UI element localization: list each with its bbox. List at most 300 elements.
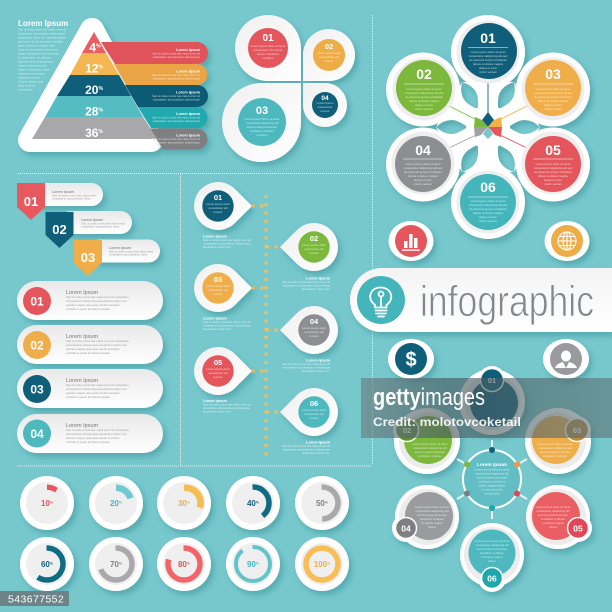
hub petal 05: sed do eiusmod tempor <box>538 513 568 517</box>
hub center ring: ut enim ad minim <box>481 488 504 492</box>
petal 03: aliqua ut enim <box>544 103 563 107</box>
hub petal 04: consectetur adipiscing elit <box>415 509 449 513</box>
pill 03: 03 <box>30 382 44 396</box>
pyramid description text: Sed ut unde omnis iste natus error sit <box>18 28 66 32</box>
pyramid description text: voluptatem accusantium doloremque <box>18 32 66 36</box>
icon: dollar: $ <box>405 349 417 371</box>
pyramid percent labels: % <box>98 129 103 135</box>
clover 04: 04 <box>321 95 329 102</box>
pyramid description text: ipsam voluptatem quia voluptas <box>18 52 59 56</box>
timeline item 01: laudantium totam rem <box>203 245 232 249</box>
petal 06: do eiusmod tempor incididunt <box>469 207 507 211</box>
petal 01: minim veniam <box>479 70 497 74</box>
timeline item 01: voluptatem accusantium doloremque <box>203 242 251 246</box>
hub petal 06: consectetur adipiscing elit <box>475 543 509 547</box>
timeline item 01 <box>202 190 251 249</box>
hub petal 04: 04 <box>401 524 411 534</box>
petal 04: Lorem ipsum dolor sit amet <box>406 162 441 166</box>
timeline item 05: consectetur elit <box>208 371 228 375</box>
pill 01: aperiam eaque ipsa quae ab illo inventore <box>66 303 120 307</box>
ribbon labels: voluptatem accusantium doloremque <box>153 76 200 80</box>
pill 03: veritatis et quasi architecto beatae <box>66 395 110 399</box>
pill 04: 04 <box>30 427 44 441</box>
petal 04: consectetur adipiscing elit sed <box>404 166 443 170</box>
petal 04: minim veniam <box>414 182 432 186</box>
clover 02 <box>313 39 345 71</box>
hub petal 02 <box>396 413 455 469</box>
timeline item 04: 04 <box>310 317 319 326</box>
hub petal 06: incididunt ut labore <box>480 551 505 555</box>
gauge 70% <box>100 548 132 580</box>
title banner <box>350 268 612 332</box>
clover 02: tempor <box>324 59 334 63</box>
petal 02 <box>392 58 456 120</box>
timeline item 05: Sed ut unde omnis iste natus error sit <box>203 402 251 406</box>
gauge 40%: % <box>256 500 260 504</box>
timeline item 03: Sed ut unde omnis iste natus error sit <box>203 320 251 324</box>
petal 03: 03 <box>545 66 561 82</box>
timeline item 03 <box>202 272 251 331</box>
pill 04: aperiam eaque ipsa quae ab illo inventore <box>66 436 120 440</box>
pill 04: veritatis et quasi architecto beatae <box>66 440 110 444</box>
icon: globe <box>544 221 590 261</box>
image id label <box>0 591 69 606</box>
gauge 100%: 100 <box>314 560 327 569</box>
pill 01: 01 <box>30 294 44 308</box>
ribbon labels: voluptatem accusantium doloremque <box>153 98 200 102</box>
ribbon labels: Sed ut unde omnis iste natus error sit <box>152 94 200 98</box>
pill 02: Lorem Ipsum <box>66 334 99 340</box>
hub petal 06: 06 <box>487 574 497 584</box>
hub petal 03 <box>530 413 588 469</box>
hub center ring: sed do eiusmod tempor <box>477 476 507 480</box>
pyramid percent labels: % <box>98 64 103 70</box>
petal 06 <box>456 170 520 234</box>
pill 04: Lorem Ipsum <box>66 423 99 429</box>
hub petal 02: incididunt ut labore <box>418 454 443 458</box>
panel: hub diagram <box>392 366 592 592</box>
hub petal 05: aliqua <box>549 525 557 529</box>
petal 01: do eiusmod tempor incididunt <box>469 58 507 62</box>
petal 06: labore et dolore magna <box>473 211 503 215</box>
ribbon labels: Lorem Ipsum <box>176 134 201 138</box>
pyramid description text: consectetur <box>18 88 33 92</box>
hub petal 06 <box>464 527 520 588</box>
petal 02: do eiusmod tempor incididunt <box>405 95 443 99</box>
petal 01 <box>456 20 520 84</box>
gauge 10% <box>41 484 58 508</box>
pill 02: 02 <box>30 338 44 352</box>
clover 04 <box>312 92 338 118</box>
ribbon labels: Lorem Ipsum <box>176 70 201 74</box>
tag row 03: Sed ut unde omnis iste natus error <box>109 250 153 254</box>
watermark band <box>361 378 612 438</box>
hub petal 03: 03 <box>573 426 581 435</box>
hub white petals <box>392 366 592 592</box>
gauge 70%: 70 <box>110 560 119 569</box>
timeline item 02: 02 <box>310 234 318 243</box>
ribbon labels: Sed ut unde omnis iste natus error sit <box>152 116 200 120</box>
hub petal 02: Lorem ipsum dolor sit amet <box>413 442 448 446</box>
timeline item 03: consectetur elit <box>208 288 228 292</box>
hub center ring: Lorem Ipsum <box>477 462 507 468</box>
hub petal 01: 01 <box>488 376 496 385</box>
timeline item 06: tempor <box>310 416 319 420</box>
petal 06: 06 <box>480 179 496 195</box>
hub petal 04: aliqua <box>428 525 436 529</box>
gauge 70%: % <box>119 562 123 566</box>
pill 03 <box>17 369 163 408</box>
panel: six petal flower diagram <box>373 15 603 239</box>
timeline item 05: tempor <box>214 375 223 379</box>
hub center ring: incididunt ut labore et <box>478 480 506 484</box>
hub petal 05: Lorem ipsum dolor sit amet <box>536 505 571 509</box>
tag row 03: voluptatem accusantium dolor <box>109 252 147 256</box>
timeline item 03: Lorem Ipsum <box>203 316 227 320</box>
hub petal 01 <box>464 368 520 430</box>
gauge 50% <box>306 487 338 519</box>
watermark band: gettyimages <box>373 384 485 411</box>
timeline item 05: Lorem ipsum dolor <box>206 367 230 371</box>
gauge 10%: % <box>50 500 54 504</box>
gauge 90%: 90 <box>247 560 256 569</box>
hub petal 05 <box>530 489 588 545</box>
timeline item 01: Lorem ipsum dolor <box>206 202 230 206</box>
petal 03: minim veniam <box>544 107 562 111</box>
tag row 03: Lorem Ipsum <box>109 246 131 250</box>
gauge 60%: 60 <box>41 560 50 569</box>
timeline item 04: Lorem ipsum dolor <box>302 326 326 330</box>
pyramid description text: ipsa quae ab illo inventore veritatis <box>18 40 63 44</box>
pyramid percent labels: 36 <box>85 126 98 140</box>
petal 01: labore et dolore magna <box>473 62 503 66</box>
pill 01: accusantium doloremque laudantium totam rem <box>66 299 128 303</box>
timeline item 01: consectetur elit <box>208 206 228 210</box>
timeline item 06 <box>282 396 331 455</box>
gauge 60%: % <box>50 562 54 566</box>
center hexagon connector <box>449 78 527 148</box>
petal 03: do eiusmod tempor incididunt <box>534 95 572 99</box>
petal 05: aliqua ut enim <box>544 178 563 182</box>
pyramid description text: quisquam est qui <box>18 76 40 80</box>
petal 02: minim veniam <box>415 107 433 111</box>
panel: arrow tag list <box>17 183 160 276</box>
tag row 01 <box>17 183 103 220</box>
pill 02 <box>17 325 163 364</box>
pyramid description text: dicta sunt explicabo nemo enim <box>18 48 59 52</box>
petal 04: aliqua ut enim <box>414 178 433 182</box>
clover 03: consectetur adipiscing elit <box>245 121 279 125</box>
timeline item 02: laudantium totam rem <box>302 287 331 291</box>
icon: light bulb <box>357 276 405 324</box>
pyramid bands <box>32 32 157 139</box>
timeline item 04: laudantium totam rem <box>302 369 331 373</box>
tag row 03 <box>74 240 160 276</box>
hub petal 04 <box>396 489 455 545</box>
timeline item 02: tempor <box>310 251 319 255</box>
pyramid percent labels: % <box>96 44 101 50</box>
gauge 20% <box>110 484 134 508</box>
petal 04: 04 <box>415 142 431 158</box>
hub petal 03: consectetur adipiscing elit <box>538 446 572 450</box>
clover 03 <box>238 98 286 146</box>
hub petal 03: incididunt ut labore <box>543 454 568 458</box>
hub center ring: veniam quis <box>484 492 500 496</box>
timeline item 03: 03 <box>214 275 222 284</box>
timeline item 04 <box>282 314 331 373</box>
timeline drops <box>194 182 338 436</box>
tag row 01: Sed ut unde omnis iste natus error <box>52 194 96 198</box>
petal 01: 01 <box>480 30 496 46</box>
tag row 02: Sed ut unde omnis iste natus error <box>81 222 125 226</box>
petal 04: do eiusmod tempor incididunt <box>404 170 442 174</box>
tag row 01: 01 <box>24 194 38 209</box>
hub petal 06: aliqua <box>488 559 496 563</box>
clover 01: consectetur elit sed do <box>254 48 283 52</box>
timeline item 01: Sed ut unde omnis iste natus error sit <box>203 238 251 242</box>
petal 05: minim veniam <box>544 182 562 186</box>
timeline item 02: Lorem ipsum dolor <box>302 243 326 247</box>
pill 04: Sed ut unde omnis iste natus error sit voluptatem <box>66 428 129 432</box>
pill 04 <box>17 414 163 453</box>
hub center ring <box>457 440 527 519</box>
clover 01: 01 <box>262 33 274 44</box>
tag row 01: voluptatem accusantium dolor <box>52 196 90 200</box>
pyramid description text: fugit sed quia consequuntur <box>18 60 54 64</box>
timeline item 06: laudantium totam rem <box>302 451 331 455</box>
hub petal 03: sed do eiusmod tempor <box>540 450 570 454</box>
gauge 40%: 40 <box>247 499 256 508</box>
tag row 03: 03 <box>81 250 95 265</box>
timeline item 02: Lorem Ipsum <box>306 276 331 280</box>
hub center ring: dolore magna aliqua <box>479 484 505 488</box>
pyramid description text: sit aspernatur aut odit aut <box>18 56 51 60</box>
pill 02: accusantium doloremque laudantium totam rem <box>66 343 128 347</box>
gauge 40% <box>237 487 269 519</box>
pyramid percent labels: % <box>98 86 103 92</box>
pill 04: accusantium doloremque laudantium totam rem <box>66 432 128 436</box>
hub petal 06: sed do eiusmod tempor <box>477 547 507 551</box>
clover 03: Lorem ipsum dolor sit amet <box>245 117 280 121</box>
pyramid description text: magni dolores eos qui <box>18 64 47 68</box>
pyramid description text: laudantium totam rem aperiam eaque <box>18 36 66 40</box>
pill 03: Lorem Ipsum <box>66 378 99 384</box>
white petals <box>373 15 603 239</box>
petal 06: consectetur adipiscing elit sed <box>469 203 508 207</box>
petal 01: consectetur adipiscing elit sed <box>469 54 508 58</box>
hub petal 06: et dolore magna <box>482 555 503 559</box>
timeline item 01: Lorem Ipsum <box>203 234 227 238</box>
ribbon labels: Lorem Ipsum <box>176 90 201 94</box>
ribbons <box>101 42 208 150</box>
gauge 20%: % <box>119 500 123 504</box>
timeline item 05: voluptatem accusantium doloremque <box>203 406 251 410</box>
pyramid description text: dolorem ipsum quia <box>18 80 44 84</box>
pill 03: aperiam eaque ipsa quae ab illo inventore <box>66 391 120 395</box>
timeline item 05: Lorem Ipsum <box>203 399 227 403</box>
ribbon labels: voluptatem accusantium doloremque <box>153 140 200 144</box>
gauge 80%: % <box>187 562 191 566</box>
gauge 100%: % <box>327 562 331 566</box>
timeline item 05 <box>202 355 251 414</box>
pill 03: accusantium doloremque laudantium totam rem <box>66 387 128 391</box>
pill 01: veritatis et quasi architecto beatae <box>66 307 110 311</box>
gauge 90%: % <box>256 562 260 566</box>
panel: vertical timeline <box>194 182 338 456</box>
clover 02: consectetur elit <box>319 55 339 59</box>
pyramid percent labels: 28 <box>85 104 98 118</box>
petal 02: Lorem ipsum dolor sit amet <box>407 87 442 91</box>
hub petal 02: 02 <box>403 426 411 435</box>
petal 02: 02 <box>416 66 432 82</box>
panel: percentage gauges <box>20 476 349 591</box>
hub petal 05: incididunt ut labore <box>541 517 566 521</box>
gauge 90% <box>236 547 270 581</box>
pyramid percent labels: 20 <box>85 83 98 97</box>
petal 04 <box>392 132 454 194</box>
petal 01: Lorem ipsum dolor sit amet <box>471 50 506 54</box>
hub petal 04: sed do eiusmod tempor <box>417 513 447 517</box>
petal 05: do eiusmod tempor incididunt <box>534 170 572 174</box>
timeline item 04: consectetur elit <box>304 330 324 334</box>
clover 03: sed do eiusmod tempor <box>247 125 277 129</box>
tag row 02: voluptatem accusantium dolor <box>81 224 119 228</box>
clover 04: Lorem ipsum <box>317 101 334 105</box>
timeline item 05: laudantium totam rem <box>203 410 232 414</box>
timeline item 01: 01 <box>214 193 222 202</box>
petal 01: aliqua ut enim <box>479 66 498 70</box>
clover 02: Lorem ipsum dolor <box>317 51 341 55</box>
clover 02: 02 <box>325 42 333 51</box>
gauge 60% <box>31 548 63 580</box>
timeline item 06: voluptatem accusantium doloremque <box>283 448 330 452</box>
clover 04: consectetur <box>318 105 333 109</box>
timeline item 02: Sed ut unde omnis iste natus error sit <box>282 280 330 284</box>
pyramid description text: nesciunt neque porro <box>18 72 46 76</box>
pyramid percent labels: 12 <box>85 62 98 76</box>
timeline item 03: tempor <box>214 292 223 296</box>
hub petal 05: et dolore magna <box>543 521 564 525</box>
petal 05: 05 <box>545 142 561 158</box>
image id label: 543677552 <box>8 594 64 606</box>
gauge 100% <box>306 548 338 580</box>
gauge 50%: % <box>325 500 329 504</box>
ribbon labels: Sed ut unde omnis iste natus error sit <box>152 73 200 77</box>
petal 03: labore et dolore magna <box>538 99 568 103</box>
gauge 80% <box>168 548 200 580</box>
hub petal 03: Lorem ipsum dolor sit amet <box>538 442 573 446</box>
timeline item 06: Lorem ipsum dolor <box>302 408 326 412</box>
ribbon labels: Lorem Ipsum <box>176 112 201 116</box>
clover 01: tempor incididunt <box>257 52 279 56</box>
timeline item 04: Sed ut unde omnis iste natus error sit <box>282 362 330 366</box>
timeline item 03: laudantium totam rem <box>203 327 232 331</box>
hub center ring: Lorem ipsum dolor sit amet <box>475 468 510 472</box>
pill 02: Sed ut unde omnis iste natus error sit voluptatem <box>66 339 129 343</box>
timeline item 01: tempor <box>214 210 223 214</box>
timeline item 06: 06 <box>310 399 318 408</box>
gauge plates <box>20 476 349 591</box>
hub petal 04: Lorem ipsum dolor sit amet <box>415 505 450 509</box>
petal 06: minim veniam <box>479 219 497 223</box>
ribbon labels: Sed ut unde omnis iste natus error sit <box>152 52 200 56</box>
timeline item 04: voluptatem accusantium doloremque <box>283 366 330 370</box>
pill 02: veritatis et quasi architecto beatae <box>66 351 110 355</box>
timeline item 06: Lorem Ipsum <box>306 440 331 444</box>
timeline item 04: tempor <box>310 334 319 338</box>
hub petal 04: incididunt ut labore <box>420 517 445 521</box>
tag row 02: 02 <box>52 222 67 237</box>
pill 01: Lorem Ipsum <box>66 290 99 296</box>
clover 04: tempor <box>320 109 330 113</box>
hub petal 05: 05 <box>573 524 583 534</box>
petal 05: labore et dolore magna <box>538 174 568 178</box>
petal 05 <box>522 132 584 194</box>
pill 02: aperiam eaque ipsa quae ab illo inventore <box>66 347 120 351</box>
hub petal 02: consectetur adipiscing elit <box>413 446 447 450</box>
gauge 10%: 10 <box>41 499 50 508</box>
tag row 01: Lorem Ipsum <box>52 190 74 194</box>
timeline item 02 <box>282 231 331 291</box>
pyramid percent labels: % <box>98 108 103 114</box>
watermark band: Credit: molotovcoketail <box>373 417 521 429</box>
clover 01: ut labore <box>262 56 274 60</box>
ribbon labels: Sed ut unde omnis iste natus error sit <box>152 137 200 141</box>
clover 03: incididunt ut labore <box>250 129 275 133</box>
hub petal 02: sed do eiusmod tempor <box>415 450 445 454</box>
gauge 80%: 80 <box>178 560 187 569</box>
petal 03: consectetur adipiscing elit sed <box>534 91 573 95</box>
timeline item 06: Sed ut unde omnis iste natus error sit <box>282 444 330 448</box>
tag row 02: Lorem Ipsum <box>81 218 103 222</box>
petal 02: aliqua ut enim <box>415 103 434 107</box>
petal 05: consectetur adipiscing elit sed <box>534 166 573 170</box>
clover 01 <box>248 28 288 68</box>
timeline item 03: voluptatem accusantium doloremque <box>203 324 251 328</box>
gauge 30%: 30 <box>178 499 187 508</box>
timeline item 03: Lorem ipsum dolor <box>206 284 230 288</box>
timeline item 06: consectetur elit <box>304 412 324 416</box>
gauge 20%: 20 <box>110 499 119 508</box>
ribbon labels: voluptatem accusantium doloremque <box>153 55 200 59</box>
ribbon labels: Lorem Ipsum <box>176 48 201 52</box>
pyramid percent labels: 4 <box>89 40 96 54</box>
pill 03: Sed ut unde omnis iste natus error sit voluptatem <box>66 383 129 387</box>
clover 03: 03 <box>256 105 268 117</box>
pyramid percent labels <box>85 40 103 140</box>
panel: pyramid chart <box>18 19 208 150</box>
pill 01: Sed ut unde omnis iste natus error sit voluptatem <box>66 295 129 299</box>
petal 02: consectetur adipiscing elit sed <box>405 91 444 95</box>
timeline item 02: voluptatem accusantium doloremque <box>283 284 330 288</box>
pyramid description text: ratione voluptatem sequi <box>18 68 50 72</box>
icon: dollar <box>388 339 434 379</box>
timeline item 05: 05 <box>214 358 222 367</box>
pyramid description text: quasi architecto beatae vitae <box>18 44 55 48</box>
heading: pyramid: Lorem Ipsum <box>18 19 68 28</box>
petal 06: aliqua ut enim <box>479 215 498 219</box>
petal 02: labore et dolore magna <box>409 99 439 103</box>
hub petal 06: Lorem ipsum dolor sit amet <box>475 539 510 543</box>
icon: bar chart <box>388 221 434 261</box>
ribbon labels: voluptatem accusantium doloremque <box>153 119 200 123</box>
hub center ring: consectetur adipiscing elit <box>475 472 509 476</box>
gauge 50%: 50 <box>316 499 325 508</box>
petal 06: Lorem ipsum dolor sit amet <box>471 199 506 203</box>
petal 03 <box>522 58 584 120</box>
ribbon labels <box>152 48 201 144</box>
pyramid description text: dolor sit amet <box>18 84 36 88</box>
